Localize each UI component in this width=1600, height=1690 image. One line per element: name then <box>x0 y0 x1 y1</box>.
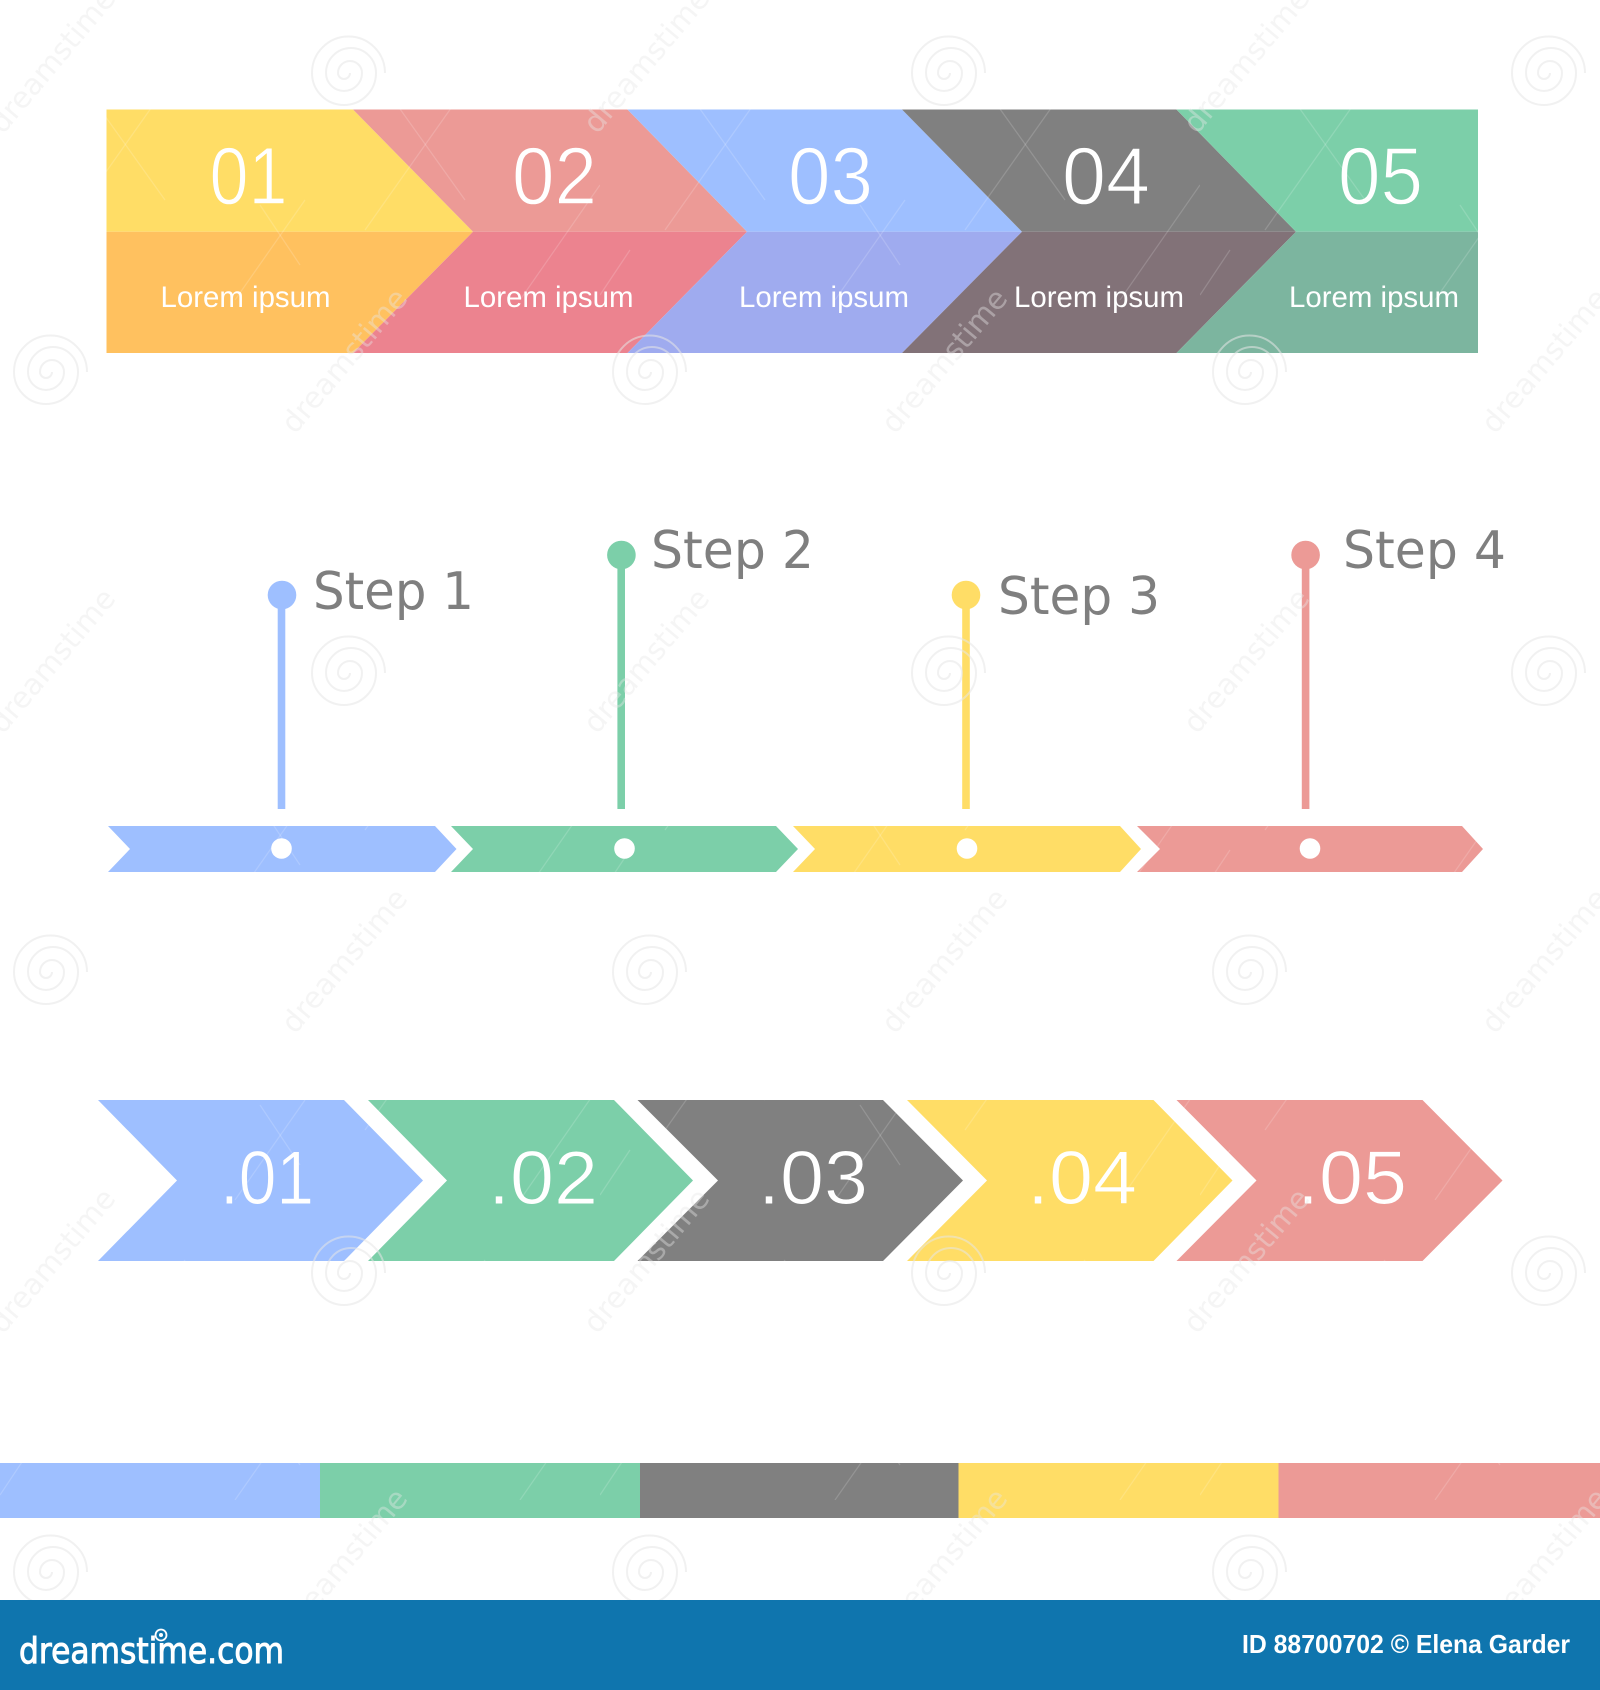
chevron 05 <box>1176 110 1478 353</box>
step 4 pin <box>1291 521 1506 809</box>
chevron .02 <box>368 1100 693 1261</box>
timeline arrow segment 1 <box>108 826 456 872</box>
chevron 01 <box>106 110 473 353</box>
chevron 05: Lorem ipsum <box>1289 281 1459 314</box>
credit text: ID 88700702 © Elena Garder <box>1242 1629 1570 1659</box>
watermark layer: dreamstime <box>874 882 1014 1039</box>
timeline arrow segment 2 <box>451 826 798 872</box>
chevron .02: .02 <box>488 1136 598 1221</box>
chevron 01: Lorem ipsum <box>160 281 330 314</box>
step 2 pin: Step 2 <box>651 521 814 581</box>
step 1 pin: Step 1 <box>313 562 474 622</box>
timeline arrow segment 4 <box>1137 826 1483 872</box>
chevron .05 <box>1176 1100 1502 1261</box>
chevron 02: Lorem ipsum <box>464 281 634 314</box>
chevron 04: 04 <box>1062 131 1150 222</box>
panel: numbered chevron band <box>106 110 1478 353</box>
panel: large chevrons <box>98 1100 1502 1261</box>
chevron 04 <box>902 110 1296 353</box>
footer bar <box>0 1600 1600 1690</box>
chevron 03: 03 <box>788 131 873 222</box>
watermark layer: dreamstime <box>274 882 414 1039</box>
watermark layer: dreamstime <box>874 282 1014 439</box>
watermark layer: dreamstime <box>576 1182 716 1339</box>
chevron .01: .01 <box>220 1136 314 1221</box>
watermark layer: dreamstime <box>874 1482 1014 1639</box>
chevron 02 <box>353 110 747 353</box>
watermark layer: dreamstime <box>274 282 414 439</box>
panel: colour bar <box>0 1463 1600 1518</box>
panel: step timeline <box>108 521 1506 872</box>
watermark layer: dreamstime <box>1176 582 1316 739</box>
chevron 05: 05 <box>1338 131 1423 222</box>
chevron 04: Lorem ipsum <box>1014 281 1184 314</box>
watermark layer: dreamstime <box>274 1482 414 1639</box>
chevron .05: .05 <box>1297 1136 1407 1221</box>
step 1 pin <box>268 562 474 809</box>
chevron 03: Lorem ipsum <box>739 281 909 314</box>
step 4 pin: Step 4 <box>1343 521 1506 581</box>
chevron 02: 02 <box>512 131 597 222</box>
watermark layer: dreamstime <box>1176 1182 1316 1339</box>
chevron .03: .03 <box>758 1136 868 1221</box>
chevron .03 <box>638 1100 963 1261</box>
logo: dreamstime.com: dreamstime.com <box>19 1631 284 1672</box>
chevron 03 <box>628 110 1022 353</box>
chevron .04: .04 <box>1027 1136 1137 1221</box>
watermark layer: dreamstime <box>576 582 716 739</box>
chevron .04 <box>907 1100 1232 1261</box>
step 3 pin: Step 3 <box>998 567 1160 627</box>
timeline arrow segment 3 <box>793 826 1141 872</box>
chevron 01: 01 <box>210 131 288 222</box>
step 3 pin <box>952 567 1160 809</box>
step 2 pin <box>607 521 814 809</box>
chevron .01 <box>98 1100 423 1261</box>
